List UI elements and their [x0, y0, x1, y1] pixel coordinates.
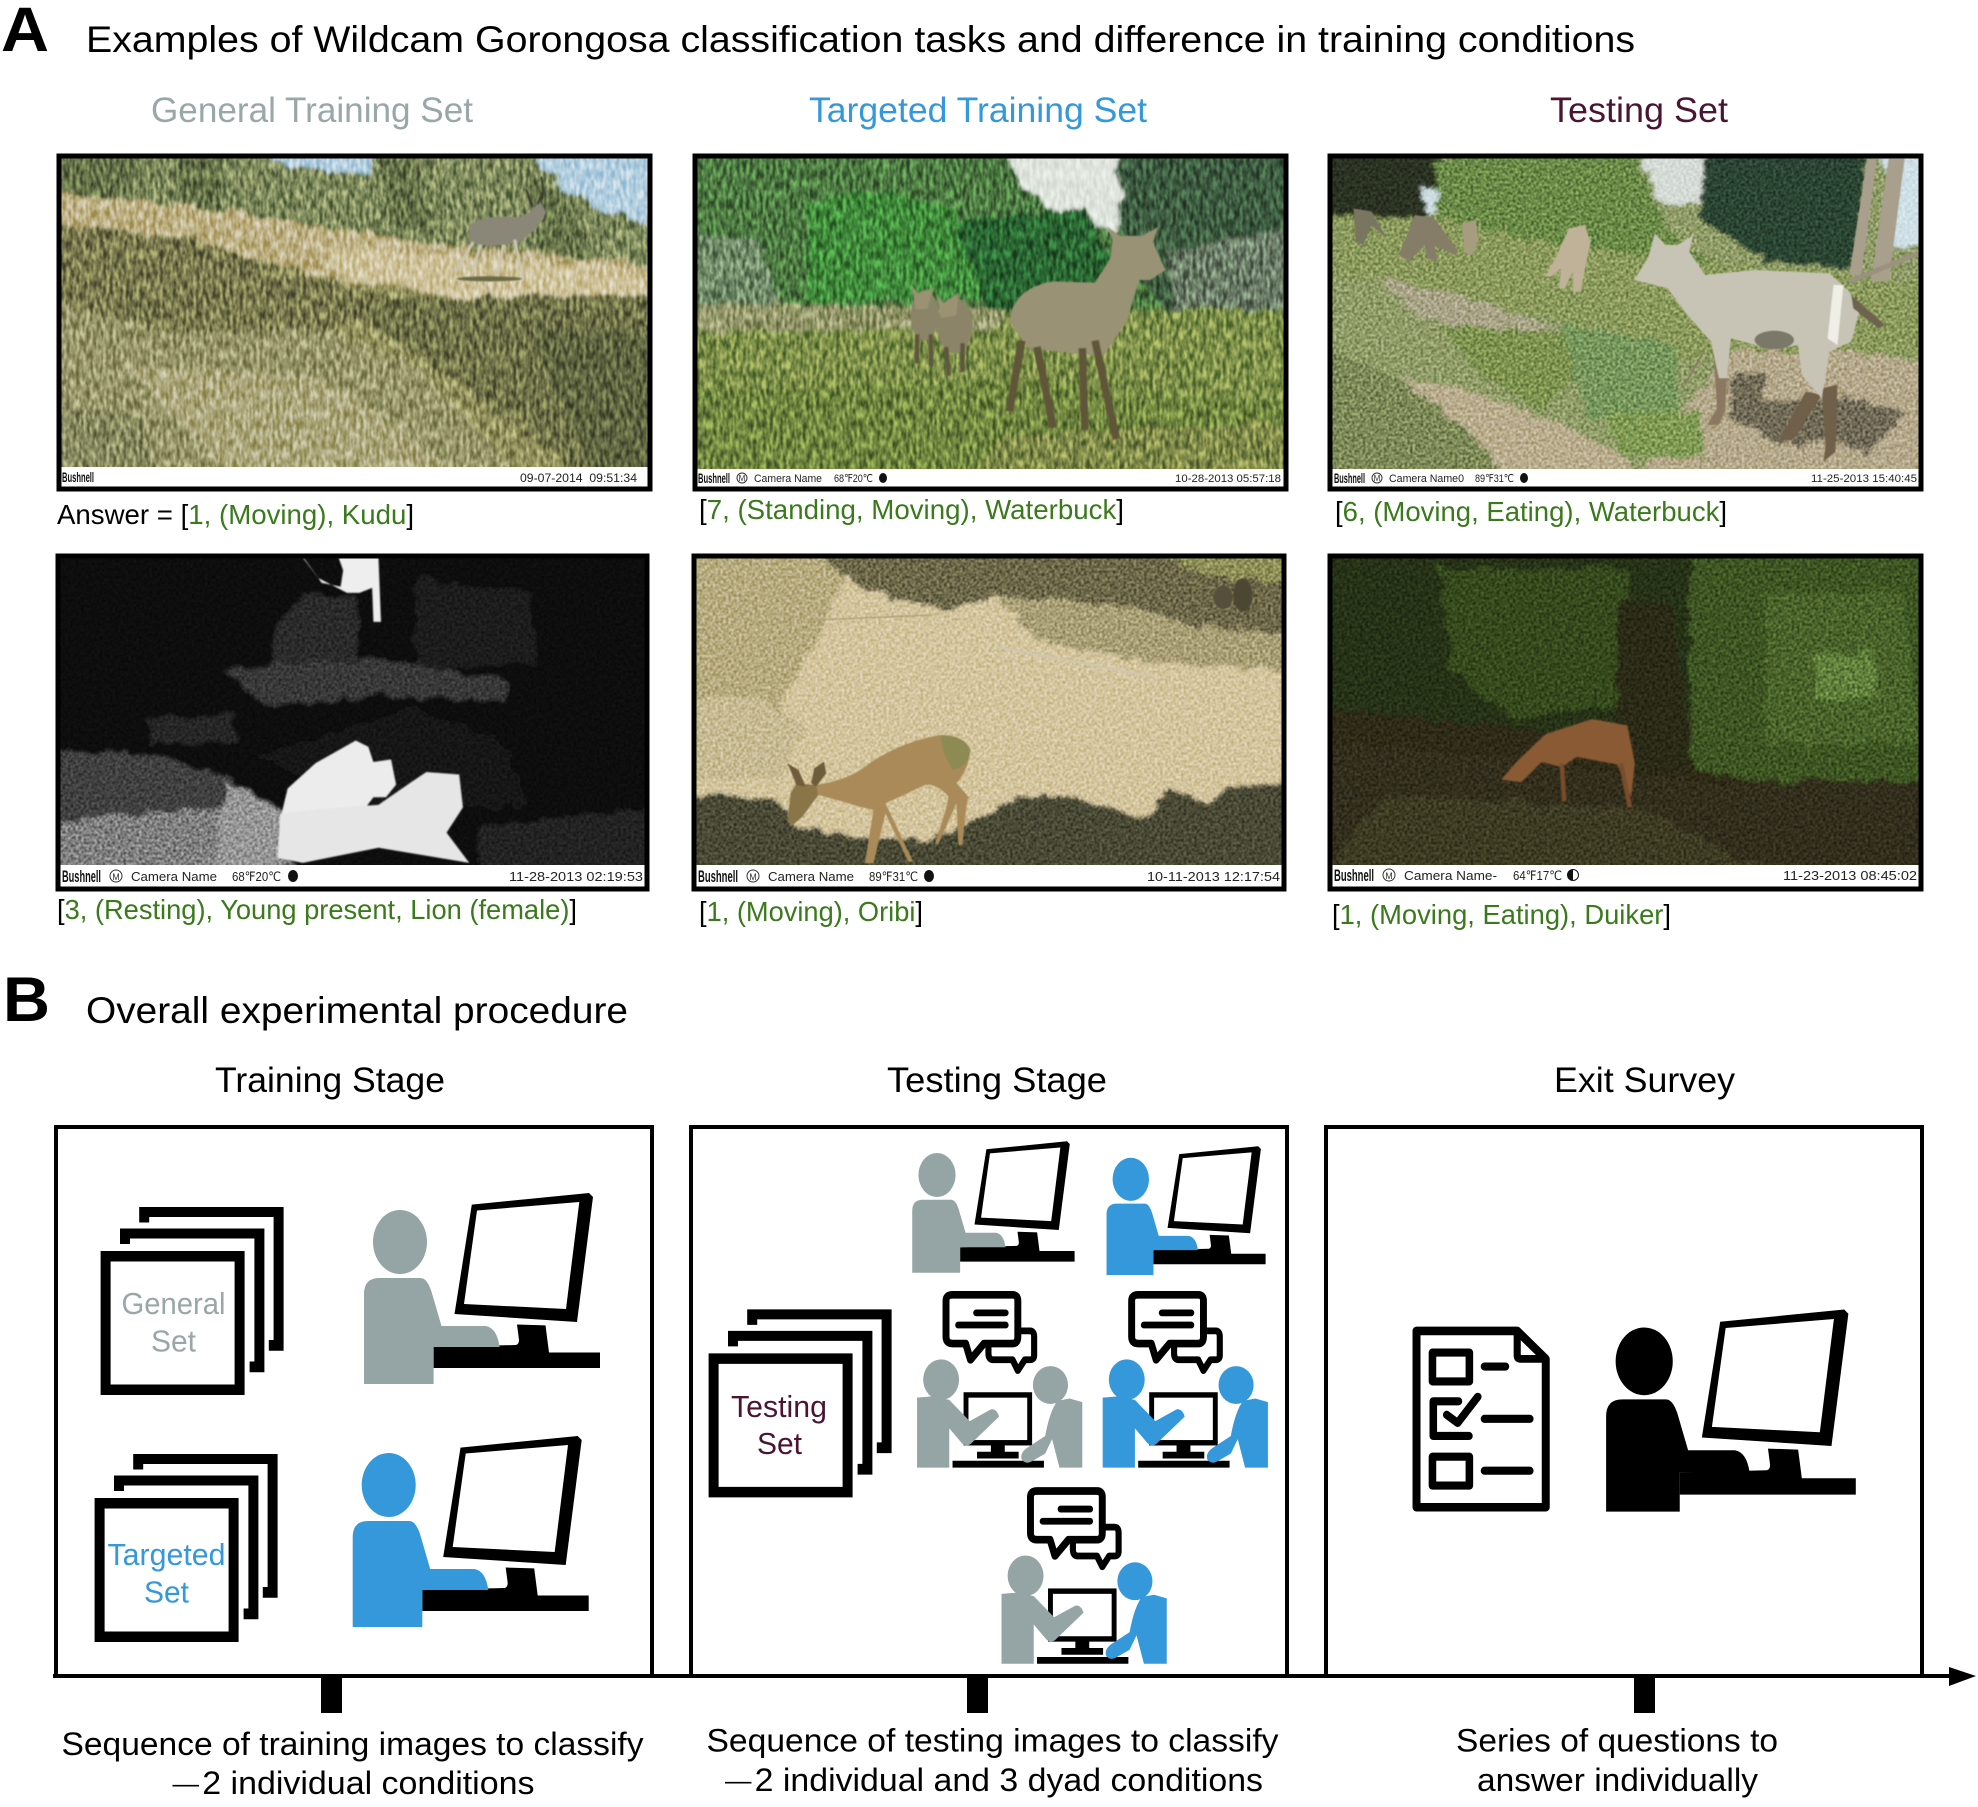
photo: duiker in dark forest	[1318, 549, 1936, 889]
icon: gray person at computer	[364, 1193, 600, 1384]
photo: lionesses at night: Bushnell	[62, 867, 101, 886]
icon: half moon	[1568, 870, 1578, 880]
description: exit survey: Series of questions to	[1456, 1722, 1778, 1758]
caption: waterbuck moving eating: [6, (Moving, Eating), Waterbuck]	[1335, 496, 1727, 527]
description: training stage: —	[172, 1770, 199, 1798]
icon: moon	[924, 870, 934, 882]
photo: lionesses at night: Camera Name	[131, 869, 217, 884]
caption: oribi: [1, (Moving), Oribi]	[699, 896, 923, 927]
icon: general set stack: Set	[151, 1324, 196, 1358]
panel: training stage	[56, 1127, 652, 1676]
photo: kudu on grassy slope	[50, 145, 669, 489]
description: training stage: 2 individual conditions	[202, 1765, 534, 1801]
stage heading: exit survey: Exit Survey	[1554, 1061, 1736, 1100]
icon: testing set stack: Set	[757, 1426, 802, 1461]
caption: waterbuck standing moving: [7, (Standing, Moving), Waterbuck]	[699, 494, 1124, 525]
icon: targeted set stack: Targeted	[108, 1537, 226, 1572]
title of section A: Examples of Wildcam Gorongosa classification tasks and difference in training conditions	[86, 19, 1635, 60]
description: exit survey: answer individually	[1477, 1762, 1758, 1798]
white caption strip	[1330, 469, 1921, 489]
description: testing stage: 2 individual and 3 dyad conditions	[755, 1762, 1263, 1798]
photo: duiker in dark forest: 64℉17℃	[1513, 868, 1562, 883]
photo: oribi on dirt: Camera Name	[768, 869, 854, 884]
photo: kudu on grassy slope: 09-07-2014 09:51:34	[520, 471, 637, 485]
panel: exit survey	[1326, 1127, 1922, 1676]
description: testing stage: Sequence of testing images to classify	[706, 1722, 1278, 1758]
photo: oribi on dirt	[680, 540, 1296, 889]
photo: lionesses at night	[50, 549, 656, 889]
caption: duiker: [1, (Moving, Eating), Duiker]	[1332, 899, 1671, 930]
icon: general set stack	[101, 1207, 284, 1395]
description: training stage: Sequence of training images to classify	[62, 1726, 644, 1762]
icon: M badge	[747, 870, 759, 882]
icon: general set stack: General	[122, 1286, 226, 1321]
description: testing stage: —	[725, 1767, 751, 1795]
icon: blue individual	[1107, 1146, 1266, 1275]
photo: oribi on dirt: Bushnell	[698, 867, 738, 886]
panel: testing stage	[691, 1127, 1287, 1676]
white caption strip	[695, 469, 1286, 489]
panel label B: B	[3, 965, 50, 1035]
photo: waterbuck on green grass: Bushnell	[698, 470, 730, 486]
icon: targeted set stack	[95, 1454, 278, 1642]
icon: testing set stack	[709, 1309, 892, 1497]
column heading: general training set: General Training Set	[151, 91, 473, 130]
photo: waterbuck among shrubs: 11-25-2013 15:40:45	[1811, 473, 1917, 485]
tick: testing	[967, 1676, 988, 1713]
photo: waterbuck among shrubs	[1320, 145, 1936, 489]
icon: gray dyad	[917, 1295, 1082, 1468]
photo: duiker in dark forest: Bushnell	[1334, 866, 1374, 885]
photo: kudu on grassy slope: Bushnell	[62, 469, 94, 485]
icon: M badge: M	[1385, 871, 1393, 881]
white caption strip	[59, 467, 650, 487]
photo: waterbuck on green grass: 68℉20℃	[834, 473, 873, 485]
icon: M badge	[1383, 869, 1395, 881]
photo: oribi on dirt: 10-11-2013 12:17:54	[1147, 869, 1280, 884]
icon: M badge	[737, 473, 747, 483]
icon: M badge: M	[112, 872, 120, 882]
photo: lionesses at night: 68℉20℃	[232, 869, 281, 884]
icon: black person at computer	[1606, 1309, 1856, 1512]
stage heading: testing: Testing Stage	[887, 1061, 1107, 1100]
white caption strip	[58, 865, 647, 887]
photo: duiker in dark forest: Camera Name-	[1404, 868, 1497, 883]
icon: M badge	[110, 870, 122, 882]
icon: mixed dyad	[1002, 1491, 1167, 1664]
photo: duiker in dark forest: 11-23-2013 08:45:02	[1783, 868, 1917, 883]
photo: waterbuck on green grass: Camera Name	[754, 473, 822, 485]
photo: waterbuck among shrubs: Camera Name0	[1389, 473, 1464, 485]
icon: questionnaire checklist	[1417, 1331, 1546, 1507]
column heading: testing set: Testing Set	[1550, 91, 1728, 130]
description: exit survey	[1456, 1722, 1778, 1798]
icon: moon	[879, 473, 887, 483]
photo: lionesses at night: 11-28-2013 02:19:53	[509, 869, 643, 884]
icon: testing set stack: Testing	[731, 1389, 827, 1424]
photo: waterbuck among shrubs: 89℉31℃	[1475, 473, 1514, 485]
icon: M badge: M	[749, 872, 757, 882]
white caption strip	[694, 865, 1284, 887]
timeline arrow	[53, 1667, 1976, 1686]
photo: waterbuck among shrubs: Bushnell	[1334, 470, 1365, 486]
description: testing stage	[706, 1722, 1278, 1798]
tick: exit survey	[1634, 1676, 1655, 1713]
caption: lion: [3, (Resting), Young present, Lion (female)]	[57, 894, 577, 925]
caption: kudu answer: Answer = [1, (Moving), Kudu]	[57, 499, 414, 530]
column heading: targeted training set: Targeted Training Set	[809, 91, 1147, 130]
description: training stage	[62, 1726, 644, 1801]
icon: M badge: M	[739, 474, 746, 483]
icon: targeted set stack: Set	[144, 1574, 189, 1610]
white caption strip	[1330, 865, 1921, 887]
stage heading: training: Training Stage	[215, 1061, 445, 1100]
icon: M badge: M	[1374, 474, 1381, 483]
photo: waterbuck on green grass	[681, 145, 1299, 489]
photo: waterbuck on green grass: 10-28-2013 05:57:18	[1175, 473, 1281, 485]
icon: blue dyad	[1103, 1295, 1268, 1468]
photo: oribi on dirt: 89℉31℃	[869, 869, 918, 884]
tick: training	[321, 1676, 342, 1713]
icon: moon	[288, 870, 298, 882]
icon: M badge	[1372, 473, 1382, 483]
icon: gray individual	[912, 1141, 1075, 1273]
title of section B: Overall experimental procedure	[86, 990, 628, 1031]
icon: blue person at computer	[353, 1436, 589, 1627]
icon: moon	[1520, 473, 1528, 483]
